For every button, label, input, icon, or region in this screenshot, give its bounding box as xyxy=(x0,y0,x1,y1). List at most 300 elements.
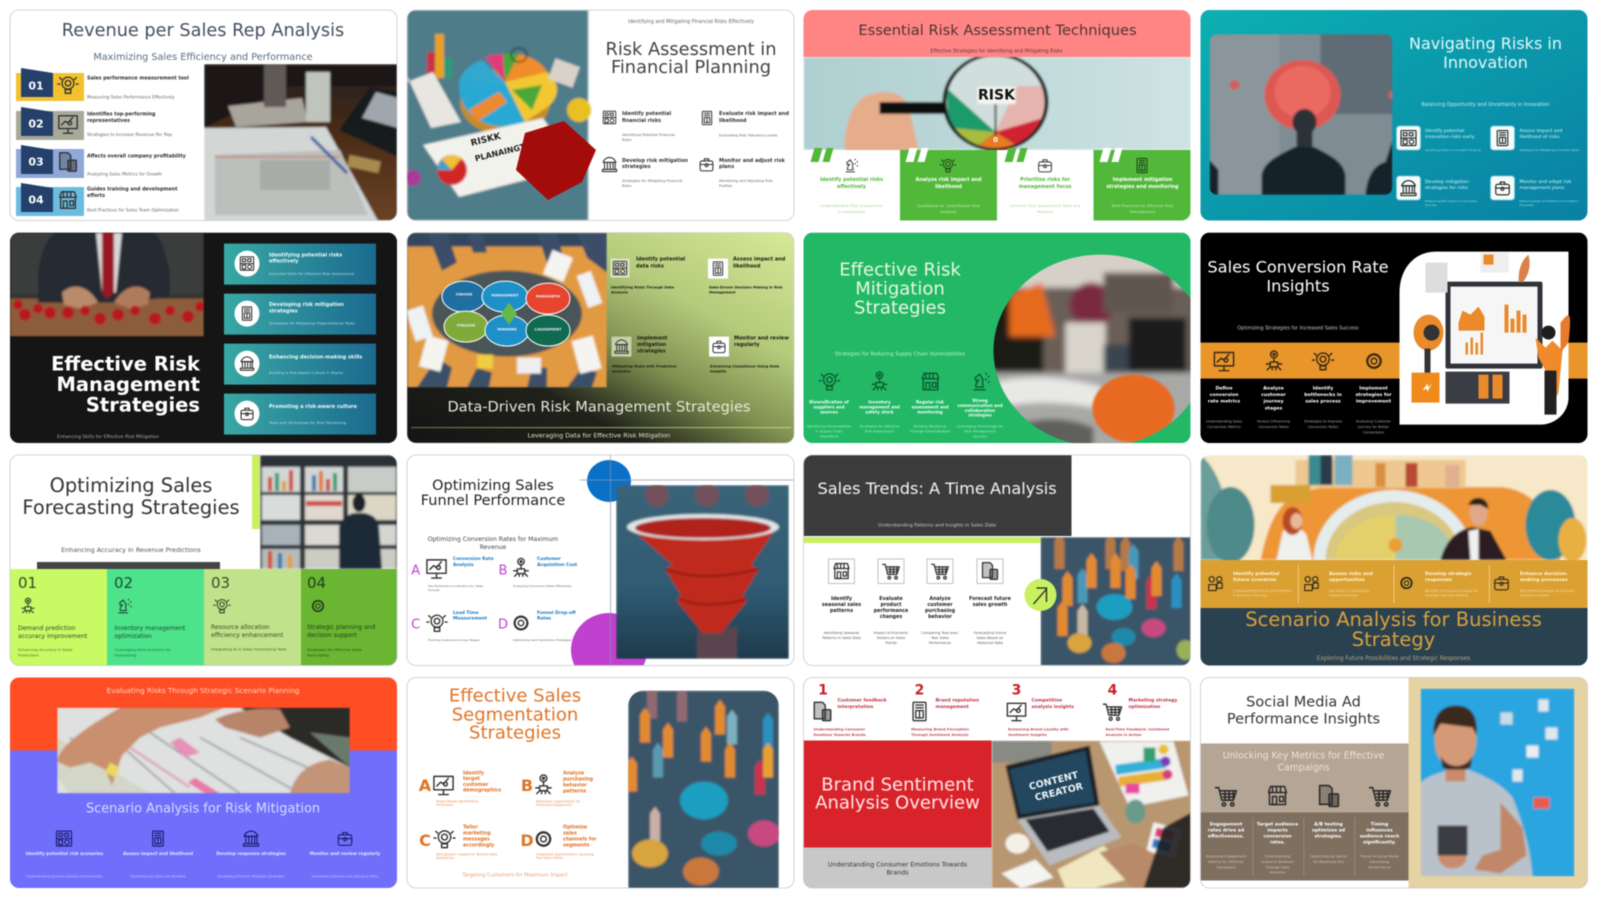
icon: briefcase xyxy=(1039,160,1051,172)
item 2: product xyxy=(880,602,902,608)
item: testing: A/B testing xyxy=(1314,821,1343,827)
icon: target robot xyxy=(536,775,551,794)
column 3: Methods xyxy=(1037,208,1053,214)
item: develop: strategies for risks. xyxy=(1425,184,1469,190)
chart labels: MARAGNTH xyxy=(536,295,560,299)
column 2: Analysis xyxy=(940,208,957,214)
item A: target xyxy=(463,776,481,782)
item 1: 1 xyxy=(818,682,828,698)
item: define: rate metrics xyxy=(1208,398,1240,404)
column 03: 03 xyxy=(211,574,230,592)
column 03: Integrating AI in Sales Forecasting Tools xyxy=(211,646,287,652)
block: taupe upper band xyxy=(1200,744,1408,812)
item: identify xyxy=(1304,353,1342,429)
item: identify: Strategies to Improve xyxy=(1304,420,1342,424)
title: Data-Driven Risk Management Strategies xyxy=(447,399,751,416)
item 2: Strategies for Effective xyxy=(859,425,900,429)
block: red title area xyxy=(804,740,992,848)
panel: Social Media Ad Performance Insights xyxy=(1200,678,1588,888)
subtitle: Targeting Customers for Maximum Impact xyxy=(461,872,568,878)
item A: Identify xyxy=(463,770,485,776)
item C: C xyxy=(411,618,420,632)
panel: Scenario Analysis for Business Strategy xyxy=(1200,455,1588,666)
label: laptop screen text: CONTENT xyxy=(1028,769,1080,792)
item: target: Analytics xyxy=(1270,870,1286,874)
item 2: Through Sentiment Analysis xyxy=(911,733,968,737)
subtitle: Revenue xyxy=(480,544,507,550)
item A: Analysis xyxy=(453,562,474,568)
card: identifying xyxy=(224,244,376,285)
item D: segments xyxy=(563,842,590,848)
item: identify financial risks: Identifying Potential Financial xyxy=(622,133,675,137)
subtitle: Balancing Opportunity and Uncertainty in Innovation xyxy=(1421,102,1550,108)
title: Optimizing Sales xyxy=(432,478,554,494)
item: identify: Conversion Rates xyxy=(1308,425,1338,429)
item 03 xyxy=(16,145,187,178)
item B: Analyzing Conversion Rates Effectively xyxy=(513,584,572,588)
item: develop: Develop response strategies xyxy=(216,851,286,857)
chart: six venn circles xyxy=(442,281,570,346)
title: Strategies xyxy=(86,394,200,417)
item: develop: Benefits of Scenario Analysis for xyxy=(1425,589,1479,593)
item: implement: Implement xyxy=(637,336,668,342)
item: implement: strategies for xyxy=(1355,392,1392,398)
column 01: accuracy improvement xyxy=(18,632,88,640)
icon: bank xyxy=(612,337,632,357)
title: Essential Risk Assessment Techniques xyxy=(858,22,1137,39)
item: develop xyxy=(1401,570,1479,598)
photo: man studying chart wall xyxy=(260,455,398,569)
title: Scenario Analysis for Business xyxy=(1245,608,1542,631)
card: identifying: Essential Skills for Effective Risk Assessment xyxy=(269,271,355,276)
subtitle: Campaigns xyxy=(1277,762,1330,773)
item: analyze: Analyze xyxy=(1263,385,1284,391)
panel: Optimizing Sales Forecasting Strategies xyxy=(10,455,398,666)
item: identify financial risks: Identify potential xyxy=(622,111,672,117)
item: develop: Strategic Decision-Making xyxy=(1425,594,1468,598)
item: testing: Optimizing Ad Spend xyxy=(1310,854,1347,858)
item D: Your Sales Efforts xyxy=(536,856,563,860)
accent: dark bar xyxy=(37,562,220,569)
item: timing: Advertising xyxy=(1370,860,1389,864)
column 03 xyxy=(204,569,301,666)
icon: chip xyxy=(1396,126,1420,150)
icon: chess xyxy=(846,159,857,172)
quote mark xyxy=(1004,148,1028,162)
item: target: impacts xyxy=(1267,827,1288,833)
item 2: management xyxy=(936,704,970,710)
item: enhance: Analysis in Action xyxy=(1520,594,1549,598)
item D: D xyxy=(498,618,508,632)
photo: chart pegs with cyan disc xyxy=(627,684,780,900)
item: engagement: Campaigns xyxy=(1216,866,1236,870)
photo: blurred workers with orange glove xyxy=(984,248,1204,458)
item C xyxy=(419,824,498,860)
block: grey subtitle area xyxy=(804,848,992,888)
item: timing: Timing xyxy=(1371,821,1388,827)
title: Sales Trends: A Time Analysis xyxy=(817,479,1057,498)
subtitle: Brands xyxy=(886,869,909,876)
item 4: Success xyxy=(973,435,987,439)
item 02: Strategies to Increase Revenue Per Rep xyxy=(87,132,172,138)
header block xyxy=(804,455,1072,536)
item 02: 02 xyxy=(28,118,44,130)
item C: Tailor xyxy=(463,824,478,830)
band: gold item strip xyxy=(1200,560,1588,608)
chart labels: CINOISE xyxy=(456,293,473,297)
item 4: Strong xyxy=(972,398,988,403)
item: implement xyxy=(612,336,677,374)
item 2: 2 xyxy=(915,682,924,698)
item 1: suppliers and xyxy=(813,404,845,409)
column 02: 02 xyxy=(114,574,133,592)
item: monitor: Monitor and review regularly xyxy=(310,851,380,857)
icon: presentation xyxy=(59,116,77,133)
item B: Analyze xyxy=(563,770,585,776)
item: engagement: rates drive ad xyxy=(1208,827,1244,833)
item A: Key Performance Indicators for Sales xyxy=(428,584,484,588)
item: enhance: Enhance decision- xyxy=(1520,570,1568,576)
title: Optimizing Sales xyxy=(50,474,212,497)
item 04: Best Practices for Sales Team Optimization xyxy=(87,208,179,214)
item 1: in Supply Chain xyxy=(815,430,843,434)
item: assess impact: Management xyxy=(709,291,736,295)
icon: bank xyxy=(1396,176,1420,200)
item: monitor: Processes xyxy=(1520,203,1534,207)
icon: chip xyxy=(56,831,72,846)
item 4 xyxy=(957,373,1004,439)
item: target: rates. xyxy=(1270,839,1285,845)
item 4: Forecasting Future xyxy=(974,631,1006,635)
item: identify data risks: Identifying Risks Through Data xyxy=(611,286,675,290)
item 4: 4 xyxy=(1108,682,1118,698)
title: Effective Risk xyxy=(51,353,201,376)
subtitle: Enhancing Accuracy in Revenue Predictions xyxy=(61,546,201,554)
item 4: Historical Data xyxy=(977,641,1003,645)
item 3: 3 xyxy=(1012,682,1021,698)
title: Innovation xyxy=(1443,53,1528,72)
shape: purple circle xyxy=(571,613,647,687)
arrow badge xyxy=(1024,579,1056,611)
icon: briefcase xyxy=(700,159,713,171)
icon: worker xyxy=(872,372,887,390)
item 2: Risk Assessment xyxy=(865,430,895,434)
item C: Measurement xyxy=(453,615,487,621)
illustration: dashboard and analyst xyxy=(1400,252,1570,425)
column 3: Prioritize risks for xyxy=(1020,177,1070,183)
item: develop xyxy=(1396,176,1478,207)
icon: presentation xyxy=(434,776,453,795)
item: target: conversion xyxy=(1263,833,1292,839)
item A: Conversion Rate xyxy=(453,556,494,562)
item: define: Define xyxy=(1215,385,1233,391)
icon: target robot xyxy=(22,598,34,613)
item: assess: Assess risks and xyxy=(1329,570,1373,576)
icon: target robot xyxy=(514,558,528,576)
panel: Navigating Risks in Innovation xyxy=(1200,10,1588,220)
item: identify: Understanding Future Uncertainties xyxy=(1233,589,1292,593)
item 4: strategies xyxy=(968,412,992,417)
item: develop mitigation xyxy=(602,157,688,188)
item: implement: Journey for Better xyxy=(1357,425,1390,429)
icon: briefcase xyxy=(338,832,352,845)
item B: behavior xyxy=(563,782,587,788)
card: enhancing xyxy=(224,344,376,385)
item: implement: Analytics xyxy=(612,370,631,374)
panel: Effective Risk Management Strategies xyxy=(10,233,398,443)
item: target: Through Data xyxy=(1264,866,1290,870)
item: monitor: management plans. xyxy=(1520,184,1566,190)
item 04: 04 xyxy=(28,194,44,206)
icon: documents xyxy=(814,702,831,721)
item 3: Through Diversification xyxy=(909,430,950,434)
photo: team around venn diagram xyxy=(406,233,607,388)
item 4: Sales Based on xyxy=(977,636,1003,640)
item 3: analysis insights xyxy=(1032,704,1074,710)
item 4 xyxy=(1103,682,1177,737)
item: assess: Strategies for Mitigating Innovation Risks xyxy=(1520,148,1580,152)
item B: Behavioral Segmentation for xyxy=(536,800,581,804)
icon: cart xyxy=(878,559,904,584)
item C: Tracking Customer Journey Stages xyxy=(427,638,480,642)
item 1: Patterns in Sales Data xyxy=(822,636,861,640)
item: identify: Identify potential risk scenarios xyxy=(26,851,104,857)
item B: purchasing xyxy=(563,776,594,782)
title: Social Media Ad xyxy=(1246,694,1361,710)
item 3: Competitive xyxy=(1032,697,1062,703)
item 3 xyxy=(921,559,960,645)
item: monitor plans: plans xyxy=(719,164,734,170)
item 3: Year Sales xyxy=(931,636,949,640)
item: timing: Performance xyxy=(1368,866,1391,870)
card: developing xyxy=(224,294,376,335)
column 1: effectively xyxy=(837,184,867,190)
item: identify data risks: data risks xyxy=(636,264,664,270)
item: evaluate risk: Evaluating Risk Tolerance Levels xyxy=(719,134,778,138)
icon: bank xyxy=(602,157,617,172)
item: identify financial risks xyxy=(603,111,675,142)
item 2: performance xyxy=(874,608,909,614)
card: enhancing: Building a Risk-Aware Culture in Teams xyxy=(269,370,343,375)
item 01: Sales performance measurement tool xyxy=(87,76,189,82)
item: enhance: making processes xyxy=(1520,576,1568,582)
column 3: management focus xyxy=(1019,184,1071,190)
item: monitor: Monitor and review xyxy=(734,336,789,342)
panel: Risk Assessment in Financial Planning xyxy=(405,10,795,220)
item A: customer xyxy=(463,782,489,788)
item 1: Diversification of xyxy=(809,399,849,404)
icon: bulb xyxy=(940,159,956,172)
icon: gear head xyxy=(515,617,527,629)
title: Financial Planning xyxy=(611,57,771,78)
item 4: Forecast future xyxy=(969,596,1012,602)
column 3: Common Risk Assessment Tools and xyxy=(1010,202,1081,208)
item 2: management and xyxy=(859,404,900,409)
item: analyze: Factors Influencing xyxy=(1257,420,1290,424)
item 3: behavior xyxy=(928,614,953,620)
item D: Rates xyxy=(537,615,551,621)
item D: sales xyxy=(563,830,577,836)
title: Strategies xyxy=(469,722,561,744)
item A: Techniques xyxy=(435,803,454,807)
item 3: Comparing Year-over- xyxy=(921,631,960,635)
item 2: Inventory xyxy=(868,399,891,404)
item 02 xyxy=(16,107,172,140)
item 3 xyxy=(909,373,950,434)
column 02: Forecasting xyxy=(114,652,137,657)
item: define xyxy=(1206,352,1242,429)
item B: Enhanced Engagement xyxy=(536,803,573,807)
item: develop mitigation: Risks xyxy=(622,184,631,188)
card: identifying: effectively xyxy=(269,259,299,265)
item 03: Affects overall company profitability xyxy=(87,154,187,160)
item 1: Operations xyxy=(819,435,839,439)
kicker: Identifying and Mitigating Financial Risks Effectively xyxy=(628,19,754,25)
quote mark xyxy=(810,148,834,162)
title: Brand Sentiment xyxy=(821,774,974,796)
item: timing: Trends in Social Media xyxy=(1359,854,1399,858)
column 04 xyxy=(301,569,398,666)
item: enhance xyxy=(1495,570,1574,598)
item: implement: Analyzing Customer xyxy=(1356,420,1392,424)
chart labels: LIAGGEMENT xyxy=(535,328,562,332)
item: develop xyxy=(216,831,286,878)
item 1: seasonal sales xyxy=(822,602,861,608)
item 3: Regular risk xyxy=(916,399,944,404)
quote mark xyxy=(906,148,928,162)
item: identify data risks xyxy=(610,257,686,295)
icon: money xyxy=(922,373,939,390)
label: risk planning sheet text xyxy=(470,132,523,162)
column 04: decision support xyxy=(307,632,357,638)
item 4: Leveraging Technology for xyxy=(957,425,1004,429)
item: testing xyxy=(1310,786,1347,864)
item: monitor xyxy=(310,832,380,878)
card: promoting xyxy=(224,394,376,435)
label: risk gauge text xyxy=(978,88,1016,144)
icon: briefcase xyxy=(709,337,729,357)
shape: red hexagon xyxy=(516,121,596,200)
item: assess: Assess impact and likelihood xyxy=(123,851,193,857)
title: Analysis Overview xyxy=(815,792,980,814)
item: timing xyxy=(1359,788,1399,870)
item 2: Evaluate xyxy=(879,596,903,602)
panel: Data-Driven Risk Management Strategies xyxy=(406,233,795,443)
title: Funnel Performance xyxy=(421,493,565,509)
item: assess impact: Assess impact and xyxy=(733,257,786,263)
icon: briefcase xyxy=(1490,176,1514,200)
item 2: Brand reputation xyxy=(936,697,979,703)
subtitle: Maximizing Sales Efficiency and Performance xyxy=(93,52,313,63)
title: Sales Conversion Rate xyxy=(1207,258,1389,277)
item 3: monitoring xyxy=(917,409,943,414)
item 2: changes xyxy=(880,614,902,620)
label: risk planning sheet text: RISKK xyxy=(470,131,503,149)
icon: cog xyxy=(1401,578,1412,588)
item: identify: Identify potential xyxy=(1425,128,1464,134)
item: testing: strategies. xyxy=(1314,833,1343,839)
item C: accordingly xyxy=(463,842,495,848)
column 2 xyxy=(900,148,997,221)
item 3: Building Resilience xyxy=(914,425,946,429)
item: implement: strategies xyxy=(637,349,666,355)
column 02 xyxy=(107,569,204,666)
photo: man with tablet xyxy=(1420,688,1574,876)
item 04 xyxy=(16,183,179,216)
panel: Optimizing Sales Funnel Performance xyxy=(407,455,795,687)
item: develop: Measuring Risk Impact in Innovation xyxy=(1425,199,1478,203)
title: Insights xyxy=(1266,277,1330,296)
item: develop: Developing Effective Mitigation Strategies xyxy=(217,874,285,878)
column 1: Understanding Risk Assessment xyxy=(820,202,883,208)
item 2: Measuring Brand Perception xyxy=(911,728,969,732)
photo: coloured chart pegs xyxy=(1040,534,1194,666)
column 01 xyxy=(10,569,107,666)
column 2: likelihood xyxy=(935,184,962,190)
item: assess xyxy=(1490,126,1580,152)
item 1: interpretation xyxy=(838,704,873,710)
item 1: Customer feedback xyxy=(838,697,888,703)
item: define: Conversion Metrics xyxy=(1207,425,1241,429)
icon: book xyxy=(702,111,712,125)
item: assess: Assess impact and xyxy=(1520,128,1562,134)
icon: book xyxy=(1490,126,1514,150)
panel: Essential Risk Assessment Techniques xyxy=(804,10,1192,221)
panel: Scenario Analysis for Risk Mitigation xyxy=(10,678,398,888)
item 01: 01 xyxy=(28,80,44,92)
item 4 xyxy=(969,559,1012,645)
item 2: Trends xyxy=(884,641,897,645)
title: Management xyxy=(56,373,200,396)
item C: Approaches xyxy=(436,856,455,860)
item: implement: Mitigating Risks with Predictive xyxy=(612,365,677,369)
icon: shop xyxy=(1268,786,1286,804)
card: developing: Developing risk mitigation xyxy=(269,302,344,308)
column 02: Inventory management xyxy=(114,624,186,632)
column 01: 01 xyxy=(18,574,37,592)
column 2: Analyze risk impact and xyxy=(915,177,982,183)
item: testing: for Maximum ROI xyxy=(1313,860,1344,864)
item: develop: Success xyxy=(1425,203,1437,207)
item C: messages xyxy=(463,837,490,842)
item: timing: significantly. xyxy=(1363,839,1396,845)
item: assess impact: likelihood xyxy=(733,264,761,270)
item 3 xyxy=(1007,682,1074,737)
column 01: Demand prediction xyxy=(18,624,76,632)
icon: documents xyxy=(1320,786,1338,806)
item: identify: Identify potential xyxy=(1233,570,1280,576)
item: analyze: customer xyxy=(1261,392,1287,398)
item D: channels for xyxy=(563,836,597,842)
icon: lightbulb gear xyxy=(1312,353,1334,370)
icon: shop xyxy=(828,559,854,584)
item 2 xyxy=(859,372,900,434)
title: Revenue per Sales Rep Analysis xyxy=(62,21,344,41)
icon: devices xyxy=(977,559,1003,584)
item A: A xyxy=(411,564,420,578)
item: identify financial risks: financial risks xyxy=(622,118,661,124)
item 3: customer xyxy=(927,602,953,608)
icon: gear head xyxy=(537,832,550,846)
item: assess xyxy=(1305,570,1373,598)
icon: chip xyxy=(603,111,616,124)
item 2: Impact of Economic xyxy=(874,631,908,635)
icon: presentation xyxy=(1214,352,1234,371)
icon: chip xyxy=(610,259,630,278)
item 3: assessment and xyxy=(911,404,949,409)
item 01: Measuring Sales Performance Effectively xyxy=(87,94,175,100)
icon: bank xyxy=(234,351,260,377)
